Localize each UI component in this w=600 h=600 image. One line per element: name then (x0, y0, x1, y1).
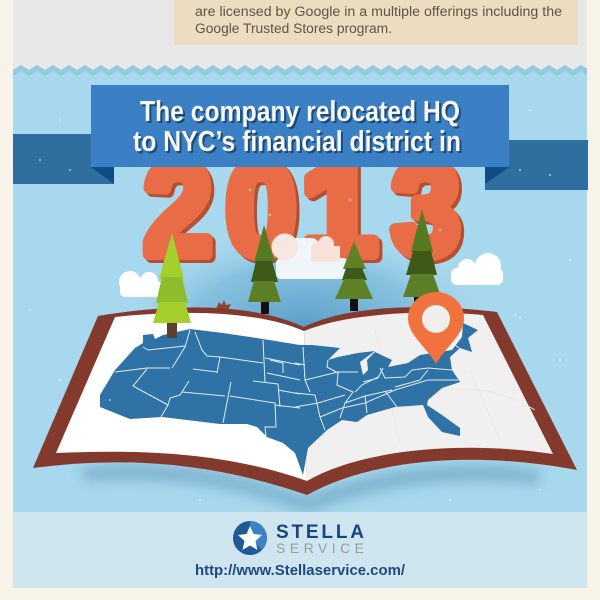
year 2013: 1 (304, 138, 380, 285)
ribbon: left tail (13, 134, 114, 184)
banner with heading: The company relocated HQ (140, 96, 460, 128)
year 2013: 2 (147, 138, 215, 285)
banner with heading: The company relocated HQ (142, 98, 462, 130)
logo: Stella Service (233, 521, 364, 556)
year 2013: 0 (226, 135, 296, 282)
logo: Stella Service: STELLA (276, 522, 364, 543)
year 2013: 3 (395, 138, 463, 285)
page creases (375, 330, 535, 445)
banner with heading (91, 85, 509, 167)
panel: blue relocation section (13, 64, 587, 512)
banner with heading: to NYC’s financial district in (133, 126, 461, 158)
banner with heading: to NYC’s financial district in (135, 128, 463, 160)
year 2013: 3 (392, 135, 460, 282)
state borders (115, 330, 464, 437)
tree: dark green 3 (335, 241, 373, 311)
left page (56, 313, 307, 481)
United States (100, 323, 478, 475)
ribbon: right tail (485, 140, 588, 190)
tree: dark green 2 (248, 225, 281, 314)
tree: light green (153, 233, 191, 338)
callout: Google licensing text: are licensed by Google in a multiple offerings including the (195, 4, 562, 19)
right page (304, 313, 553, 481)
leaf sprig (216, 300, 231, 310)
book shadow (80, 465, 540, 512)
map pin (408, 292, 464, 364)
open book map (33, 307, 577, 495)
logo: Stella Service: SERVICE (276, 540, 364, 556)
year 2013 (144, 135, 463, 285)
tree: dark green 4 (403, 209, 441, 304)
logo icon (233, 521, 267, 555)
year 2013: 0 (229, 138, 299, 285)
book cover (33, 307, 577, 495)
cloud: left (119, 271, 162, 297)
website link: http://www.Stellaservice.com/ (195, 563, 405, 579)
year 2013: 2 (144, 135, 212, 282)
callout: Google licensing text: Google Trusted Stores program. (195, 21, 392, 36)
grey upper panel (13, 0, 587, 76)
year 2013: 1 (301, 135, 377, 282)
snow speckles (29, 109, 571, 501)
footer band (13, 512, 587, 588)
cloud: centre (272, 234, 348, 279)
callout: Google licensing text (174, 0, 578, 45)
cloud: right (451, 253, 503, 285)
